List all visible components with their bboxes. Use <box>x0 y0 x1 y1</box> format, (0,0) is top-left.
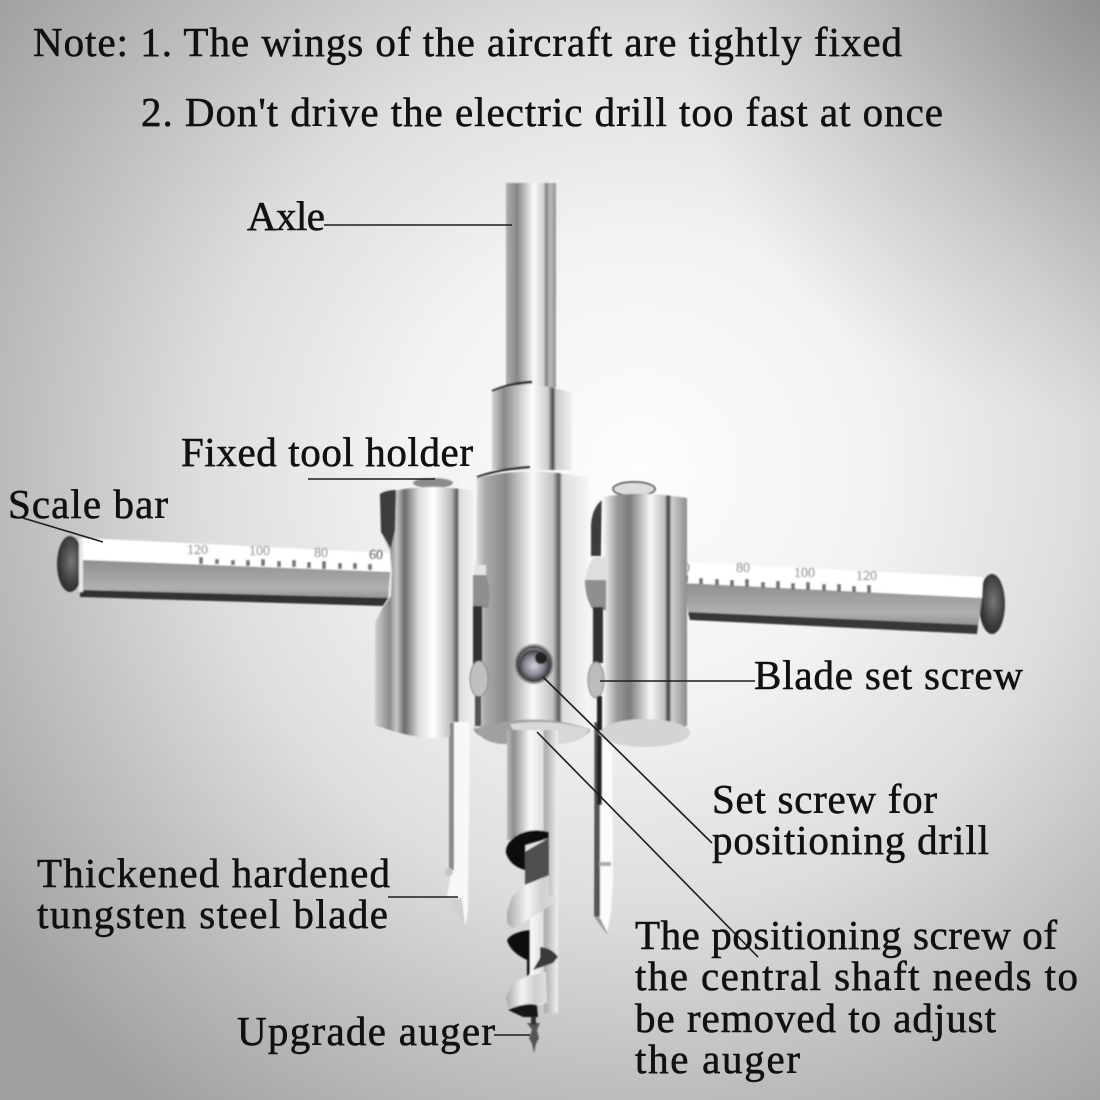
label: upgrade auger: Upgrade auger <box>237 1008 495 1054</box>
note heading: 2. Don't drive the electric drill too fast at once <box>141 89 943 135</box>
central body <box>474 467 590 744</box>
left scale bar <box>57 536 390 606</box>
left scale bar: 120 <box>187 543 208 558</box>
label: blade <box>37 850 390 937</box>
right scale bar <box>682 561 1005 634</box>
label: set screw for positioning drill: positioning drill <box>712 817 989 863</box>
side blade clamps <box>470 557 606 730</box>
right scale bar: 120 <box>856 569 877 584</box>
leader lines <box>23 225 758 1035</box>
label: blade: Thickened hardened <box>37 850 390 896</box>
label: positioning screw note: the central shaft needs to <box>635 953 1078 999</box>
left scale bar: 60 <box>369 548 383 563</box>
right scale bar: 80 <box>736 561 750 576</box>
left tool holder <box>375 478 473 738</box>
collar <box>492 382 572 470</box>
right tool holder <box>591 482 690 747</box>
label: set screw for positioning drill: Set screw for <box>712 776 937 822</box>
label: blade: tungsten steel blade <box>37 891 388 937</box>
label: positioning screw note: the auger <box>635 1036 800 1082</box>
left scale bar: 100 <box>249 544 270 559</box>
blade: left <box>445 718 470 925</box>
label: positioning screw note: The positioning screw of <box>635 912 1057 958</box>
blade: right <box>593 720 613 934</box>
label: set screw for positioning drill <box>712 776 989 863</box>
label: blade set screw: Blade set screw <box>754 652 1023 698</box>
note heading <box>33 19 943 135</box>
label: positioning screw note <box>635 912 1078 1082</box>
shaft: axle <box>506 183 556 388</box>
note heading: Note: 1. The wings of the aircraft are tightly fixed <box>33 19 902 65</box>
icon: positioning set screw <box>514 644 554 684</box>
auger drill <box>506 730 558 1053</box>
label: scale bar: Scale bar <box>8 481 168 527</box>
label: fixed tool holder: Fixed tool holder <box>181 429 473 475</box>
right scale bar: 0 <box>683 561 690 576</box>
right scale bar: 100 <box>794 566 815 581</box>
left scale bar: 80 <box>314 546 328 561</box>
label: axle: Axle <box>247 193 325 239</box>
label: positioning screw note: be removed to adjust <box>635 995 997 1041</box>
